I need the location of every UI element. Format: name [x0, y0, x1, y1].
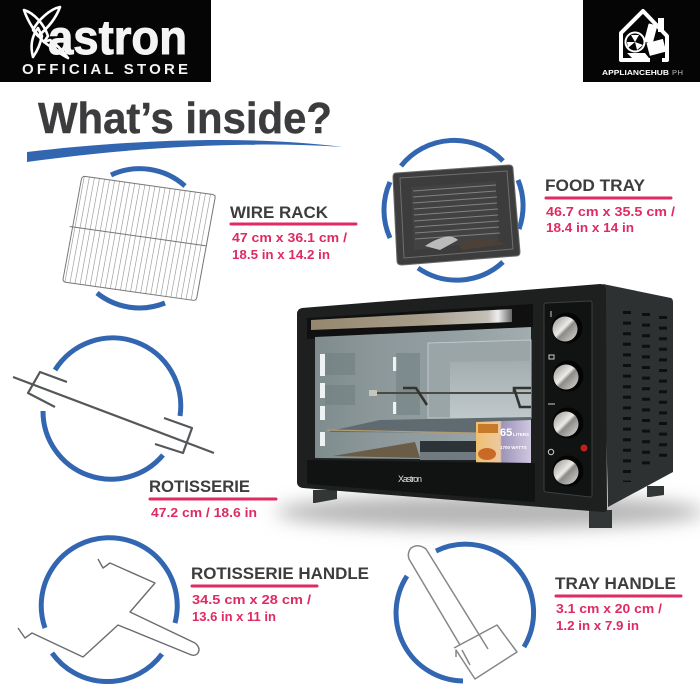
label: food tray: FOOD TRAY: [545, 177, 645, 195]
image: rotisserie: [13, 372, 214, 453]
icon: house with appliances: [621, 11, 667, 60]
panel: food tray: [384, 140, 675, 280]
image: food tray: [393, 165, 520, 265]
dimensions: food tray: 18.4 in x 14 in: [546, 220, 634, 235]
dimensions: tray handle: 3.1 cm x 20 cm /: [556, 601, 662, 616]
underline: rotisserie handle: [192, 584, 317, 588]
oven front: [297, 284, 607, 512]
panel: tray handle: [396, 544, 681, 681]
label: rotisserie: ROTISSERIE: [149, 478, 250, 496]
oven handle: [311, 309, 512, 330]
title swoosh: [27, 140, 343, 162]
circle: wire rack arcs: [97, 169, 185, 308]
label: wire rack: WIRE RACK: [230, 204, 328, 222]
oven sticker: 1700 WATTS: [500, 445, 527, 450]
text: official store: OFFICIAL STORE: [22, 61, 188, 78]
image: oven: [297, 284, 673, 528]
oven bottom panel: [307, 460, 535, 502]
oven shadow: [275, 495, 700, 529]
oven window: [315, 327, 531, 460]
underline: food tray: [546, 196, 671, 200]
panel: wire rack: [60, 169, 356, 308]
oven control panel: [544, 301, 592, 497]
title: What’s inside?: [38, 94, 332, 143]
power light: [580, 444, 588, 452]
underline: rotisserie: [150, 498, 276, 500]
circle: tray handle arcs: [396, 544, 534, 681]
circle: rotisserie arcs: [43, 338, 181, 479]
underline: tray handle: [556, 594, 681, 598]
logo: Astron official store: [0, 0, 211, 82]
knob 1: [552, 312, 582, 344]
wordmark: astron: astron: [48, 12, 187, 65]
knob 3: [552, 408, 584, 438]
image: tray handle: [408, 546, 517, 679]
underline: wire rack: [231, 222, 356, 226]
knob 4: [552, 456, 584, 486]
oven vents: [627, 311, 663, 482]
dimensions: wire rack: 18.5 in x 14.2 in: [232, 247, 330, 262]
circle: rotisserie handle arcs: [41, 538, 177, 682]
dimensions: tray handle: 1.2 in x 7.9 in: [556, 618, 639, 633]
oven brand: Xastron: [398, 474, 422, 484]
knob 2: [552, 360, 584, 392]
panel: rotisserie handle: [18, 538, 369, 682]
oven sticker: [476, 420, 531, 468]
image: wire rack: [60, 176, 216, 301]
dimensions: wire rack: 47 cm x 36.1 cm /: [232, 230, 347, 245]
label: tray handle: TRAY HANDLE: [555, 575, 676, 593]
icon: Astron star mark: [24, 7, 68, 58]
panel: rotisserie: [13, 338, 276, 520]
dimensions: rotisserie handle: 34.5 cm x 28 cm /: [192, 592, 311, 607]
oven side: [603, 284, 673, 507]
oven sticker: LITERS: [513, 432, 529, 437]
dimensions: food tray: 46.7 cm x 35.5 cm /: [546, 204, 675, 219]
oven handle recess: [307, 304, 533, 339]
dimensions: rotisserie: 47.2 cm / 18.6 in: [151, 505, 257, 520]
panel icons: [548, 311, 555, 455]
logo: ApplianceHub PH: [583, 0, 700, 82]
oven feet: [313, 486, 664, 528]
label: rotisserie handle: ROTISSERIE HANDLE: [191, 565, 369, 583]
oven sticker: 65: [500, 427, 512, 439]
image: rotisserie handle: [18, 559, 199, 657]
text: brand name: APPLIANCEHUB: [602, 68, 670, 77]
circle: food tray arcs: [384, 140, 523, 280]
dimensions: rotisserie handle: 13.6 in x 11 in: [192, 609, 276, 624]
text: PH: PH: [672, 68, 683, 77]
